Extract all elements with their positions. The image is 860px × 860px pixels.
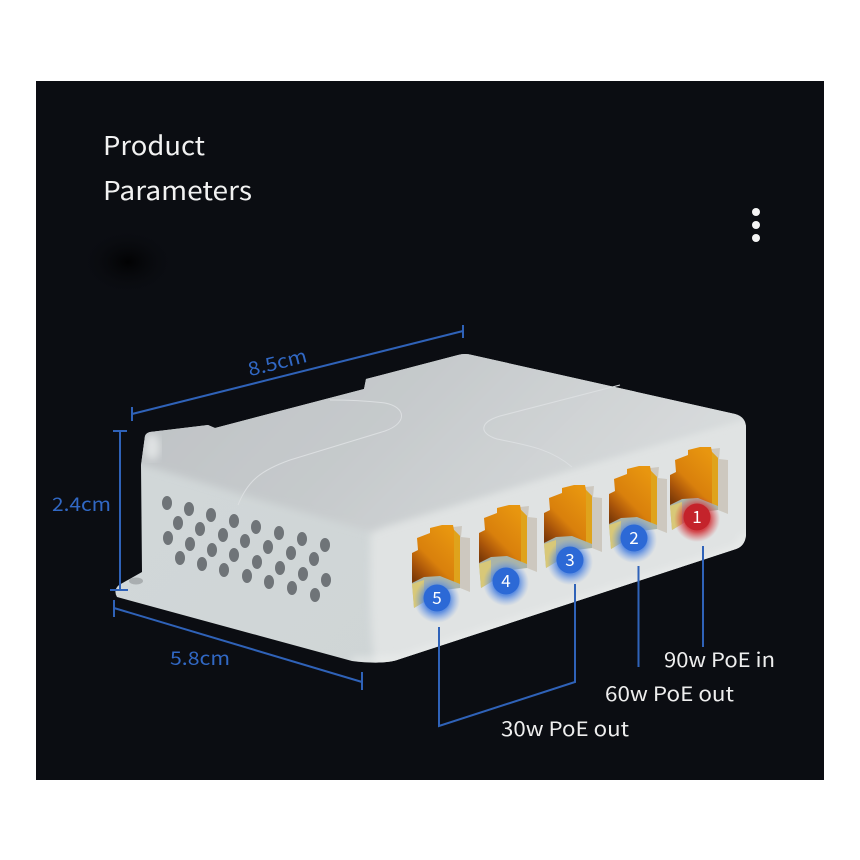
device front face	[370, 414, 746, 663]
mounting hole	[129, 578, 143, 584]
title: Parameters	[103, 171, 252, 208]
port badges	[414, 496, 720, 623]
corner highlight	[144, 434, 160, 460]
badge 5: 5	[432, 584, 442, 609]
ventilation holes	[162, 496, 331, 602]
badge 3	[547, 539, 593, 585]
dimension: length: 8.5cm	[245, 341, 310, 382]
badge 4: 4	[501, 567, 511, 592]
dimension: height: 2.4cm	[52, 490, 111, 517]
device body	[115, 354, 746, 663]
title	[103, 126, 252, 208]
dimension: width	[114, 600, 362, 690]
port labels	[501, 644, 775, 742]
infographic	[36, 81, 824, 780]
badge 4	[483, 560, 529, 606]
dimension: length	[132, 325, 463, 421]
badge 1	[674, 496, 720, 542]
port labels: 90w PoE in	[664, 644, 775, 673]
faint shadow smudge	[80, 228, 176, 296]
device top face	[141, 354, 744, 531]
badge 1: 1	[692, 503, 702, 528]
port leader lines	[439, 546, 703, 726]
ethernet ports	[412, 447, 728, 608]
bottom edge highlight	[352, 535, 746, 661]
device: PoE switch	[115, 354, 746, 663]
badge 2	[611, 517, 657, 563]
badge 5	[414, 577, 460, 623]
badge 2: 2	[629, 524, 639, 549]
icon: three dots menu	[752, 208, 760, 242]
dimension: height	[52, 431, 128, 590]
title: Product	[103, 126, 205, 163]
seam lines on lid	[238, 385, 620, 505]
port labels: 60w PoE out	[605, 678, 735, 707]
dark background panel	[36, 81, 824, 780]
badge 3: 3	[565, 546, 575, 571]
port labels: 30w PoE out	[501, 713, 629, 742]
dimension: width: 5.8cm	[170, 644, 230, 671]
